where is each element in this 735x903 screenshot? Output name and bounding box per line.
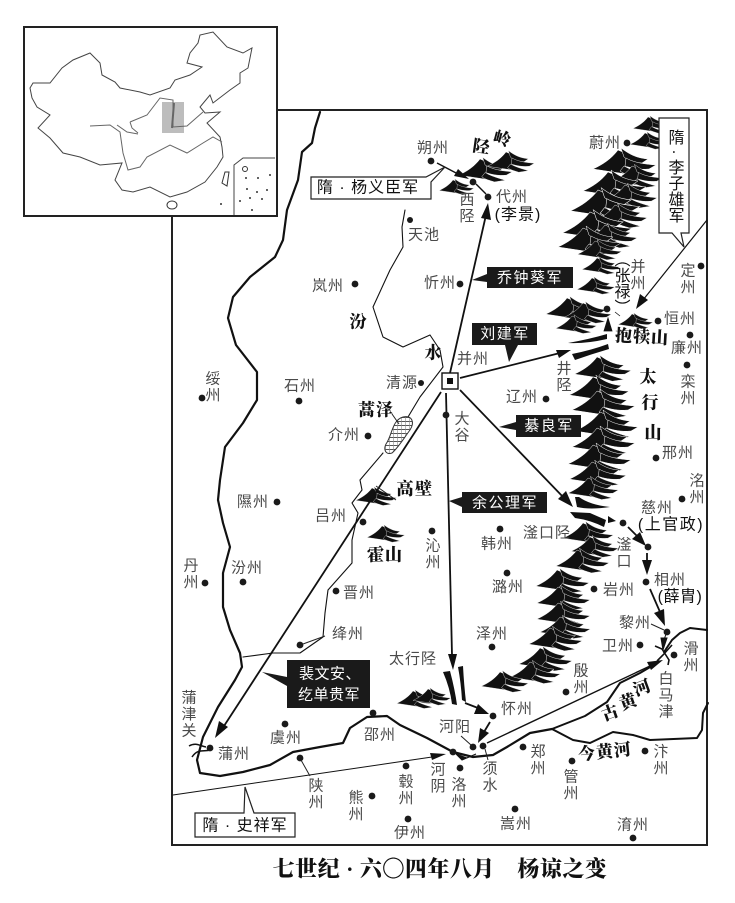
highlighted area <box>162 102 184 133</box>
place: 汴州 <box>642 744 668 776</box>
place: 介州: 介州 <box>328 426 360 444</box>
place: 伊州: 伊州 <box>394 824 426 842</box>
place: 虞州 <box>270 721 302 746</box>
place: 定州 <box>678 262 704 296</box>
place: 吕州: 吕州 <box>315 508 347 524</box>
pass: Jingxing <box>568 334 609 360</box>
label: Pei Wen'an army <box>262 660 370 708</box>
river name: 古黄河: 黄 <box>616 688 642 714</box>
place: 廉州 <box>671 332 703 356</box>
place: 蒲州: 蒲州 <box>218 746 250 762</box>
lake name: 蒿泽 <box>358 400 399 424</box>
arrow: Taiyuan to Daizhou <box>450 203 491 373</box>
arrow: Taiyuan to Fukou pass <box>460 390 573 507</box>
place: 石州: 石州 <box>284 378 316 394</box>
mountain name: 太行山 <box>640 368 662 442</box>
arrow: Xiangzhou to Lizhou <box>650 589 665 626</box>
place: 滑州: 滑州 <box>682 640 698 674</box>
place: 须水 <box>480 743 498 794</box>
place: 太行陉: 太行陉 <box>389 650 437 668</box>
place: 韩州 <box>481 526 513 552</box>
place: 滏口: 滏口 <box>614 536 632 570</box>
place: 郑州: 郑州 <box>528 744 546 776</box>
place: 相州 薛胄: (薛胄) <box>658 588 702 606</box>
place: 定州: 定州 <box>678 262 696 296</box>
inset: Hainan <box>167 201 177 209</box>
arrow: into Huaizhou <box>465 703 489 714</box>
callout: Shi Xiang army <box>195 787 295 837</box>
place: 朔州 <box>417 140 449 164</box>
range name: 陉岭: 陉 <box>471 136 492 158</box>
mountain: Huoshan <box>367 525 405 542</box>
river: Fen River <box>243 210 443 657</box>
label: Qi Liang army: 綦良军 <box>524 418 574 434</box>
place: 代州 李景 <box>485 188 541 224</box>
place: 沁州: 沁州 <box>424 538 440 570</box>
map frame <box>172 110 707 845</box>
outline of China <box>30 32 252 197</box>
place: 相州 薛胄 <box>643 572 702 606</box>
label: Qiao Zhongkui army <box>472 267 573 288</box>
place: 白马津: 白马津 <box>656 670 674 720</box>
place: 卫州: 卫州 <box>602 638 634 654</box>
place: 黎州: 黎州 <box>619 614 651 632</box>
callout: Shi Xiang army: 隋 · 史祥军 <box>202 816 288 834</box>
place: 天池: 天池 <box>408 226 440 244</box>
place: 大谷: 大谷 <box>452 410 470 444</box>
place: 慈州 上官政: (上官政) <box>638 516 704 534</box>
place: 清源: 清源 <box>386 374 418 392</box>
callout: Yang Yichen army: 隋 · 杨义臣军 <box>317 178 419 196</box>
callout: Li Zixiong army: 隋 · 李子雄军 <box>666 129 684 223</box>
label: Pei Wen'an army: 纥单贵军 <box>298 686 360 704</box>
river: ancient Yellow River <box>552 628 707 729</box>
arrow: Shuozhou to Xixing <box>437 163 486 194</box>
place: 怀州 <box>490 700 533 719</box>
inset map: China <box>24 27 277 216</box>
pass: Fukou <box>570 497 610 527</box>
arrow: Li Zixiong army <box>636 220 707 309</box>
arrow: Taiyuan to Jingxing <box>460 350 571 378</box>
place: 滑州 <box>671 640 698 674</box>
mountains: Xixing <box>439 150 534 195</box>
place: 忻州: 忻州 <box>424 274 456 292</box>
place: 吕州 <box>315 508 366 525</box>
range name: 陉岭 <box>471 127 513 158</box>
place: 熊州: 熊州 <box>346 790 364 822</box>
place: 滏口陉: 滏口陉 <box>523 524 571 542</box>
mountains: Taihang range centre <box>568 355 638 500</box>
arrow: to Baodu mountain <box>604 312 620 331</box>
place: 汾州 <box>231 560 263 585</box>
mountains: Taihang pass hill <box>397 688 451 709</box>
place: 管州: 管州 <box>562 768 578 802</box>
place: 洺州: 洺州 <box>688 472 704 506</box>
river name: 古黄河: 古 <box>598 700 621 725</box>
label: Qi Liang army <box>499 415 581 437</box>
place: 栾州: 栾州 <box>678 374 696 406</box>
place: 西陉 <box>458 179 476 224</box>
label: Yu Gongli army <box>449 492 547 513</box>
river name: 古黄河 <box>598 676 653 725</box>
place: 滏口 <box>614 520 632 570</box>
place: 晋州: 晋州 <box>343 584 375 602</box>
place: 绥州: 绥州 <box>204 370 220 404</box>
place: 岚州 <box>312 278 358 294</box>
place: 河阳: 河阳 <box>439 718 471 736</box>
place: 伊州 <box>394 816 426 842</box>
place: 毂州: 毂州 <box>396 774 414 806</box>
place: 慈州 上官政 <box>638 500 704 550</box>
callout: Yang Yichen army <box>311 167 445 199</box>
place: 殷州 <box>563 662 588 696</box>
place: 廉州: 廉州 <box>671 340 703 356</box>
place: 熊州 <box>346 790 375 822</box>
pass name: 高壁 <box>376 478 434 500</box>
river name: 今黄河: 今黄河 <box>577 739 633 764</box>
mountain name: 霍山: 霍山 <box>367 544 403 564</box>
rivers on inset <box>90 98 222 170</box>
mountain: Gaobi <box>356 487 397 506</box>
mountain name: 太行山: 山 <box>644 424 662 442</box>
river: Yellow River western bend and lower course <box>197 112 552 776</box>
river: present Yellow River <box>552 703 708 743</box>
place: 邢州: 邢州 <box>662 444 694 462</box>
place: 殷州: 殷州 <box>572 662 588 696</box>
place: 并州 north: 并州 <box>628 258 646 292</box>
arrow: Fukou to Cizhou <box>628 527 646 546</box>
place: 韩州: 韩州 <box>481 536 513 552</box>
place: 黎州 <box>619 614 670 635</box>
inset: Taiwan <box>222 172 229 186</box>
place: 泽州 <box>476 626 508 650</box>
mountain: Baodu <box>618 313 653 329</box>
place: 须水: 须水 <box>480 760 498 794</box>
place: 陕州 <box>297 755 324 810</box>
place: 并州 Taiyuan: 并州 <box>457 350 489 368</box>
place: 洛州: 洛州 <box>450 776 466 810</box>
arrow: Fukou pass exit <box>608 516 616 523</box>
title: 七世纪 · 六〇四年八月 杨谅之变 <box>273 856 608 882</box>
label: Yu Gongli army: 余公理军 <box>472 494 538 512</box>
place: 相州 薛胄: 相州 <box>654 572 686 588</box>
river name: 古黄河: 河 <box>631 676 653 700</box>
pass: Taihang <box>443 666 466 705</box>
place: 恒州: 恒州 <box>664 310 696 328</box>
place: 潞州: 潞州 <box>492 578 524 596</box>
place: 泽州: 泽州 <box>476 626 508 642</box>
inset: South China Sea <box>220 158 275 215</box>
place: 石州 <box>284 378 316 404</box>
place: 潞州 <box>492 570 524 596</box>
mountain name: 太行山: 行 <box>642 394 658 412</box>
mountains: Taihang range south <box>481 521 618 692</box>
place: 天池 <box>407 217 440 244</box>
place: 淯州 <box>617 816 649 841</box>
place: 隰州: 隰州 <box>237 494 269 510</box>
place: 丹州 <box>182 558 208 590</box>
place: 丹州: 丹州 <box>182 558 198 590</box>
place: 蒲津关: 蒲津关 <box>180 689 196 739</box>
place: 嵩州: 嵩州 <box>500 816 532 832</box>
note: 张禄 <box>604 251 630 315</box>
arrow: Xushui to Baima ford <box>487 660 663 743</box>
place: 淯州: 淯州 <box>617 816 649 834</box>
place: 郑州 <box>520 744 546 776</box>
place: 慈州 上官政: 慈州 <box>641 500 673 516</box>
river name: 汾水 <box>350 312 442 362</box>
note: 张禄: （张禄） <box>612 251 630 315</box>
place: 辽州: 辽州 <box>506 388 538 406</box>
arrow: Heyin crossing <box>456 754 476 760</box>
lake name: 蒿泽: 蒿泽 <box>358 400 394 420</box>
arrow: Cizhou to Xiangzhou <box>642 553 652 575</box>
place: 怀州: 怀州 <box>501 700 533 718</box>
mountains: Taihang range north <box>546 116 671 334</box>
arrow: Taiyuan southwest to Puzhou <box>215 392 441 738</box>
pass name: 高壁: 高壁 <box>396 478 434 498</box>
place: 绛州: 绛州 <box>332 626 364 642</box>
place: 陕州: 陕州 <box>306 778 324 810</box>
place: 汾州: 汾州 <box>231 560 263 576</box>
arrow: Shi Xiang army <box>173 753 446 795</box>
place: 嵩州 <box>500 806 532 832</box>
place: 绛州 <box>297 626 364 648</box>
marker: Taiyuan <box>442 373 458 389</box>
place: 邵州 <box>364 710 396 744</box>
place: 大谷 <box>443 410 470 444</box>
mountain name: 太行山: 太 <box>640 368 656 386</box>
place: 代州 李景: 代州 <box>496 188 528 206</box>
arrow: Taiyuan south to Taihang pass <box>446 393 457 670</box>
label: Liu Jian army: 刘建军 <box>480 326 530 342</box>
place: 河阴: 河阴 <box>428 762 446 794</box>
place: 岚州: 岚州 <box>312 278 344 294</box>
place: 汴州: 汴州 <box>652 744 668 776</box>
label: Qiao Zhongkui army: 乔钟葵军 <box>497 270 563 286</box>
place: 西陉: 西陉 <box>458 192 474 224</box>
arrow: Huaizhou to Xushui <box>478 722 490 743</box>
place: 河阳 <box>439 718 476 750</box>
mountain name: 抱犊山: 抱犊山 <box>615 325 670 348</box>
symbol: Baima ford crossing <box>655 645 672 665</box>
callout: Li Zixiong army <box>659 118 689 247</box>
place: 蔚州: 蔚州 <box>589 134 621 152</box>
lake: Gaoze <box>385 417 412 453</box>
label: Pei Wen'an army: 裴文安、 <box>299 666 361 682</box>
symbol: crossing at Puzhou <box>189 744 210 757</box>
place: 井陉: 井陉 <box>554 360 572 394</box>
place: 河阴 <box>428 749 456 794</box>
place: 代州 李景: (李景) <box>495 206 541 224</box>
river name: 汾水: 汾 <box>350 312 366 332</box>
arrow: Lizhou to Baima ford <box>661 634 667 650</box>
range name: 陉岭: 岭 <box>491 127 513 150</box>
place: 岩州: 岩州 <box>603 582 635 598</box>
river name: 汾水: 水 <box>424 342 442 362</box>
label: Liu Jian army <box>472 323 537 362</box>
place: 朔州: 朔州 <box>417 140 449 156</box>
place: 邵州: 邵州 <box>364 726 396 744</box>
place: 洺州 <box>679 472 704 506</box>
place: 虞州: 虞州 <box>270 730 302 746</box>
